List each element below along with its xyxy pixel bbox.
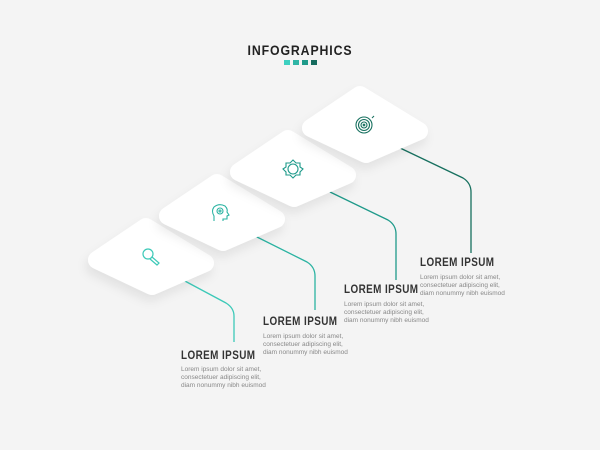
icon: head bbox=[212, 205, 229, 221]
card 3 bbox=[239, 139, 347, 198]
text block 4: Lorem ipsum dolor sit amet, bbox=[420, 274, 500, 281]
text block 4 bbox=[420, 256, 505, 297]
title squares bbox=[284, 60, 317, 65]
card 4 bbox=[311, 95, 419, 154]
text block 3: consectetuer adipiscing elit, bbox=[344, 309, 424, 316]
text block 1 bbox=[181, 349, 266, 389]
icon: target bbox=[356, 116, 374, 133]
text block 1: diam nonummy nibh euismod bbox=[181, 382, 266, 389]
icon: magnifier bbox=[143, 249, 159, 265]
text block 3: Lorem ipsum dolor sit amet, bbox=[344, 301, 424, 308]
text block 4: consectetuer adipiscing elit, bbox=[420, 282, 500, 289]
text block 3: diam nonummy nibh euismod bbox=[344, 317, 429, 324]
text block 1: consectetuer adipiscing elit, bbox=[181, 374, 261, 381]
text block 2: Lorem ipsum dolor sit amet, bbox=[263, 333, 343, 340]
text block 2: consectetuer adipiscing elit, bbox=[263, 341, 343, 348]
card 1 bbox=[97, 227, 205, 286]
text block 2: LOREM IPSUM bbox=[263, 315, 337, 328]
text block 4: diam nonummy nibh euismod bbox=[420, 290, 505, 297]
text block 1: LOREM IPSUM bbox=[181, 349, 255, 362]
text block 4: LOREM IPSUM bbox=[420, 256, 494, 269]
text block 3: LOREM IPSUM bbox=[344, 283, 418, 296]
connector line 2 bbox=[255, 236, 315, 310]
card 2 bbox=[168, 183, 276, 242]
text block 3 bbox=[344, 283, 429, 324]
title: INFOGRAPHICS bbox=[248, 42, 352, 58]
icon: gear bbox=[283, 160, 303, 178]
text block 1: Lorem ipsum dolor sit amet, bbox=[181, 366, 261, 373]
connector line 3 bbox=[328, 191, 396, 280]
text block 2: diam nonummy nibh euismod bbox=[263, 349, 348, 356]
connector line 4 bbox=[398, 147, 471, 253]
connector line 1 bbox=[183, 280, 234, 342]
text block 2 bbox=[263, 315, 348, 356]
